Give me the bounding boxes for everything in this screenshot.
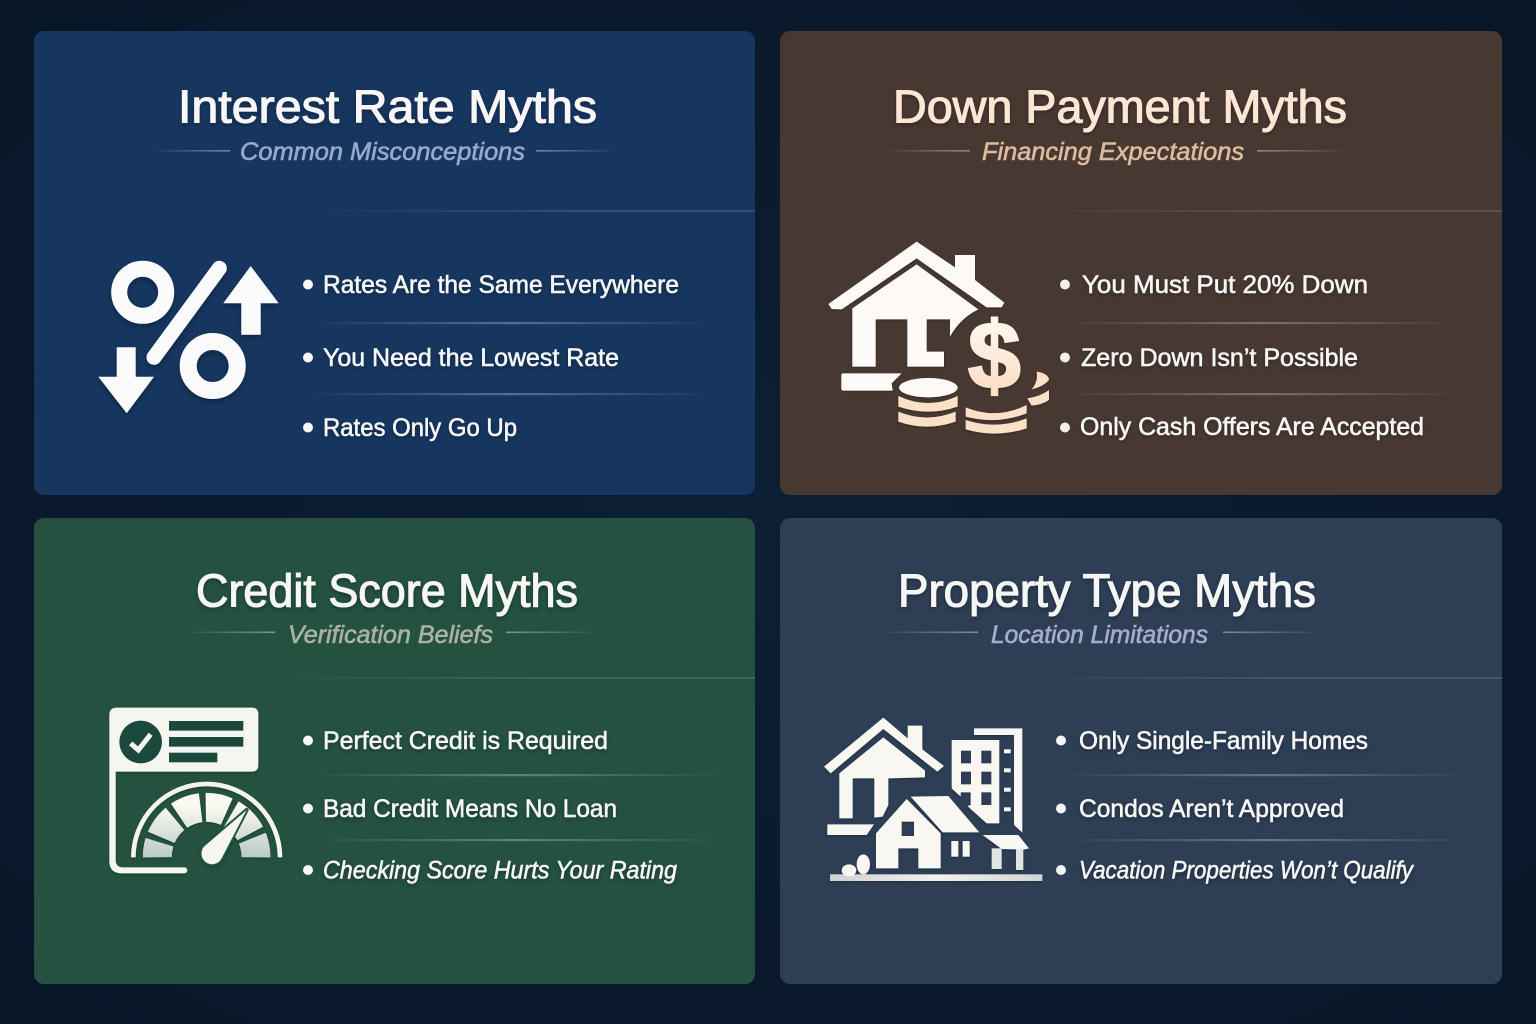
myth item: rates are the same everywhere: Rates Are the Same Everywhere [323,271,679,299]
icon: credit report with gauge [109,708,280,873]
icon: houses and apartment building [824,718,1042,881]
myth item: you must put 20% down: You Must Put 20% Down [1082,271,1368,299]
icon: percent sign with up and down arrows [98,266,279,413]
subheading: financing expectations: Financing Expectations [982,138,1244,166]
panel: down payment myths [780,31,1502,495]
panel: credit score myths [34,518,755,984]
heading: credit score myths: Credit Score Myths [196,564,578,616]
subheading: location limitations: Location Limitations [991,621,1208,649]
myth item: rates only go up: Rates Only Go Up [323,414,517,442]
myth item: you need the lowest rate: You Need the Lowest Rate [323,344,619,372]
panel: property type myths [780,518,1502,984]
heading: down payment myths: Down Payment Myths [893,80,1347,132]
myth item: bad credit means no loan: Bad Credit Means No Loan [323,795,617,823]
heading: property type myths: Property Type Myths [898,564,1316,616]
myth item: checking score hurts your rating: Checking Score Hurts Your Rating [323,856,677,884]
myth item: only single-family homes: Only Single-Family Homes [1079,727,1368,755]
myth item: only cash offers are accepted: Only Cash Offers Are Accepted [1080,413,1424,441]
myth item: perfect credit is required: Perfect Credit is Required [323,727,608,755]
myth item: zero down isn't possible: Zero Down Isn’t Possible [1081,344,1358,372]
subheading: common misconceptions: Common Misconceptions [240,138,525,166]
dollar symbol: $ [968,303,1021,409]
icon: house with dollar sign and coins [828,242,1049,434]
myth item: vacation properties won't qualify: Vacation Properties Won’t Qualify [1079,856,1414,884]
heading: interest rate myths: Interest Rate Myths [178,80,597,132]
subheading: verification beliefs: Verification Beliefs [288,621,493,649]
panel: interest rate myths [34,31,755,495]
myth item: condos aren't approved: Condos Aren’t Approved [1079,795,1344,823]
